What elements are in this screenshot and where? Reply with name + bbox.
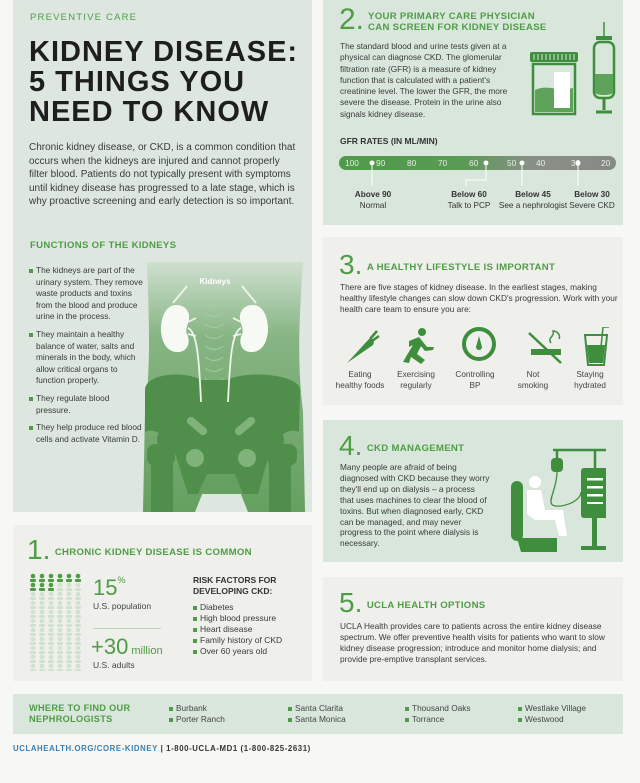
risk factors	[193, 575, 282, 656]
icons row	[347, 327, 609, 366]
GFR scale bar: 20	[601, 158, 610, 168]
panel: 2 primary care physician: Below 60	[451, 190, 487, 199]
stat: 15%: U.S. population	[93, 601, 151, 611]
panel: 2 primary care physician: Below 45	[515, 190, 551, 199]
heading 2: YOUR PRIMARY CARE PHYSICIAN	[368, 11, 535, 22]
panel: 3 healthy lifestyle: regularly	[400, 380, 432, 390]
stat: 30 million: +30 million	[91, 634, 163, 659]
kidneys	[161, 305, 268, 352]
panel: 3 healthy lifestyle: hydrated	[574, 380, 606, 390]
panel: 2 primary care physician: Severe CKD	[569, 200, 615, 210]
footer: where to find nephrologists: WHERE TO FIND OUR	[29, 703, 130, 713]
panel: 3 healthy lifestyle: Not	[527, 370, 539, 379]
risk factors: DEVELOPING CKD:	[193, 586, 272, 596]
panel: 3 healthy lifestyle: smoking	[518, 380, 548, 390]
footer: where to find nephrologists: NEPHROLOGISTS	[29, 714, 113, 724]
panel: 2 primary care physician: Talk to PCP	[448, 200, 490, 210]
risk factors: Diabetes	[200, 602, 234, 612]
footer: where to find nephrologists	[13, 694, 623, 734]
text 4: Many people are afraid of being diagnosed with CKD because they worry they'll end up on dialysis – a process that uses machines to clear the blood of toxins. But when diagnosed early, CKD can be managed, and may never progress to the point where dialysis is necessary.	[340, 462, 489, 548]
GFR scale bar: 50	[507, 158, 516, 168]
GFR scale bar: 60	[469, 158, 478, 168]
intro text: Chronic kidney disease, or CKD, is a common condition that occurs when the kidneys are injured and cannot properly filter blood. Patients do not typically present with symptoms until kidney disease has progressed to a late stage, which is why proactive screening and early detection is so important.	[29, 142, 295, 207]
stat: 30 million	[91, 634, 163, 670]
GFR scale bar: 100	[345, 158, 359, 168]
GFR scale bar: 30	[571, 158, 580, 168]
panel: 1 CKD is common	[13, 525, 312, 681]
footer: where to find nephrologists: Westwood	[525, 714, 564, 724]
panel: intro and functions	[13, 0, 312, 512]
stat: 15%: 15%	[93, 575, 126, 600]
spine	[205, 302, 223, 404]
GFR labels	[355, 190, 615, 210]
footer: where to find nephrologists: Santa Clarita	[295, 703, 343, 713]
heading 3: 3. A HEALTHY LIFESTYLE IS IMPORTANT	[339, 249, 555, 280]
pelvis	[145, 375, 300, 512]
footer: where to find nephrologists: Torrance	[412, 714, 444, 724]
title: NEED TO KNOW	[29, 96, 269, 128]
risk factors: RISK FACTORS FOR	[193, 575, 276, 585]
footer: where to find nephrologists: Porter Ranch	[176, 714, 225, 724]
panel: 3 healthy lifestyle: Controlling	[455, 370, 495, 379]
title	[29, 36, 298, 128]
icon labels	[336, 370, 606, 390]
risk factors: Heart disease	[200, 624, 252, 634]
functions list: They regulate blood pressure.	[36, 393, 109, 415]
GFR markers	[370, 160, 580, 186]
footer: where to find nephrologists: Santa Monica	[295, 714, 346, 724]
GFR scale bar: 40	[536, 158, 545, 168]
label: Kidneys: Kidneys	[199, 277, 231, 286]
risk factors: High blood pressure	[200, 613, 276, 623]
kicker: PREVENTIVE CARE	[30, 12, 137, 23]
icon: people grid	[30, 574, 81, 671]
panel: 5 UCLA health options	[323, 577, 623, 681]
footer: where to find nephrologists: Burbank	[176, 703, 207, 713]
risk factors: Over 60 years old	[200, 646, 267, 656]
icon: dialysis	[511, 448, 606, 552]
illustration: body with kidneys	[143, 262, 305, 512]
functions list: They maintain a healthy balance of water, salts and minerals in the body, which allow critical organs to function properly.	[36, 329, 135, 385]
panel: 2 primary care physician: Normal	[360, 200, 386, 210]
heading 4: 4. CKD MANAGEMENT	[339, 430, 464, 461]
panel: 3 healthy lifestyle: BP	[470, 380, 480, 390]
heading 2: 2.	[339, 3, 364, 36]
footer: where to find nephrologists: Thousand Oaks	[412, 703, 471, 713]
footer: where to find nephrologists: Westlake Village	[525, 703, 586, 713]
panel: 3 healthy lifestyle: Eating	[348, 370, 372, 379]
panel: 3 healthy lifestyle	[323, 237, 623, 405]
url and phone: UCLAHEALTH.ORG/CORE-KIDNEY | 1-800-UCLA-MD1 (1-800-825-2631)	[13, 744, 311, 753]
heading 5: 5. UCLA HEALTH OPTIONS	[339, 587, 486, 618]
panel: 4 CKD management	[323, 420, 623, 562]
panel: 3 healthy lifestyle: Staying	[576, 370, 604, 379]
risk factors: Family history of CKD	[200, 635, 282, 645]
icon: urine cup and syringe	[530, 22, 616, 116]
GFR title: GFR RATES (IN ML/MIN)	[340, 136, 438, 146]
heading: functions: FUNCTIONS OF THE KIDNEYS	[30, 240, 176, 251]
title: KIDNEY DISEASE:	[29, 36, 298, 68]
stat: 30 million: U.S. adults	[93, 660, 135, 670]
heading 2	[339, 3, 547, 36]
GFR scale bar	[339, 156, 616, 170]
GFR scale bar: 70	[438, 158, 447, 168]
panel: 3 healthy lifestyle: healthy foods	[336, 380, 384, 390]
text 5: UCLA Health provides care to patients across the entire kidney disease spectrum. We offer preventive health visits for patients who want to slow kidney disease progression; introduce and monitor home dialysis; and provide pre-emptive transplant services.	[340, 621, 605, 664]
GFR scale bar: 80	[407, 158, 416, 168]
text 2: The standard blood and urine tests given at a physical can diagnose CKD. The glomerular filtration rate (GFR) is a measure of kidney function that is calculated with a patient's creatinine level. The lower the GFR, the more severe the disease. Protein in the urine also signals kidney disease.	[340, 41, 507, 119]
text 3: There are five stages of kidney disease. In the earliest stages, making healthy lifestyle changes can slow down CKD's progression. Work with your health care team to ensure you are:	[340, 282, 618, 314]
functions list	[29, 265, 143, 444]
panel: 2 primary care physician: Above 90	[355, 190, 391, 199]
panel: 2 primary care physician	[323, 0, 623, 225]
functions list: They help produce red blood cells and activate Vitamin D.	[36, 422, 142, 444]
title: 5 THINGS YOU	[29, 66, 245, 98]
stat: 15%	[93, 575, 151, 611]
heading 1: 1. CHRONIC KIDNEY DISEASE IS COMMON	[27, 534, 252, 565]
panel: 3 healthy lifestyle: Exercising	[397, 370, 435, 379]
heading 2: CAN SCREEN FOR KIDNEY DISEASE	[368, 22, 547, 33]
panel: 2 primary care physician: Below 30	[574, 190, 610, 199]
GFR scale bar: 90	[376, 158, 385, 168]
panel: 2 primary care physician: See a nephrologist	[499, 200, 567, 210]
functions list: The kidneys are part of the urinary system. They remove waste products and toxins from the blood and produce urine in the process.	[36, 265, 143, 321]
